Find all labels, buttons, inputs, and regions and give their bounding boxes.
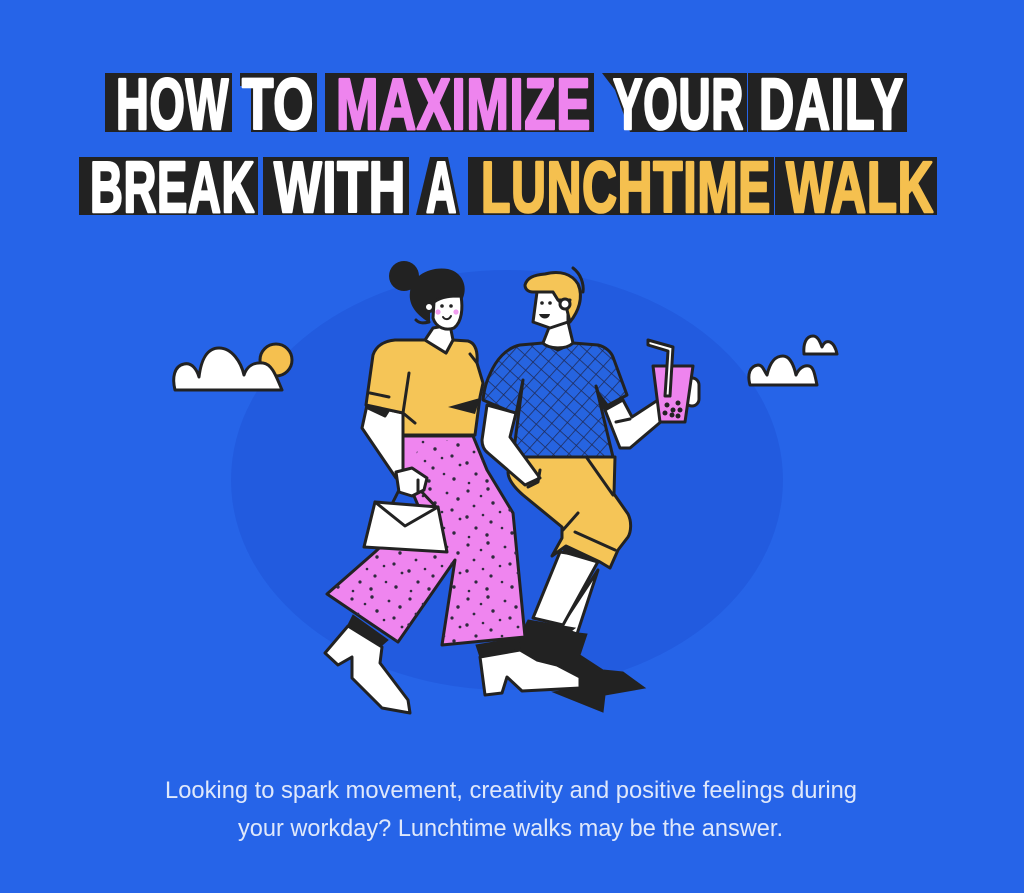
title: A (426, 148, 457, 228)
man shorts (508, 457, 631, 568)
intro text: your workday? Lunchtime walks may be the answer. (238, 815, 783, 842)
woman head (389, 261, 465, 353)
title: WALK (786, 148, 934, 228)
woman right boot (476, 638, 580, 695)
man shirt (483, 343, 627, 457)
woman arm (362, 405, 410, 478)
title: HOW (116, 65, 229, 145)
intro text (165, 777, 857, 842)
man arms and drink (482, 340, 699, 487)
title: YOUR (613, 65, 744, 145)
title: BREAK (90, 148, 255, 228)
icon: sun (260, 344, 292, 376)
title: LUNCHTIME (481, 148, 771, 228)
title: MAXIMIZE (336, 65, 591, 145)
woman pants (327, 436, 525, 645)
man head (525, 268, 583, 348)
woman shirt (366, 340, 483, 435)
intro text: Looking to spark movement, creativity and positive feelings during (165, 777, 857, 804)
icon: right small cloud (804, 336, 837, 354)
title: WITH (274, 148, 406, 228)
icon: right large cloud (749, 356, 817, 385)
woman handbag (364, 468, 447, 552)
woman left boot (325, 615, 410, 713)
title: TO (242, 65, 314, 145)
title: DAILY (759, 65, 904, 145)
man rear leg and shoe (518, 552, 645, 712)
title (79, 65, 937, 228)
illustration: couple walking (325, 261, 699, 713)
background ellipse (231, 270, 783, 690)
icon: left cloud (174, 348, 282, 390)
